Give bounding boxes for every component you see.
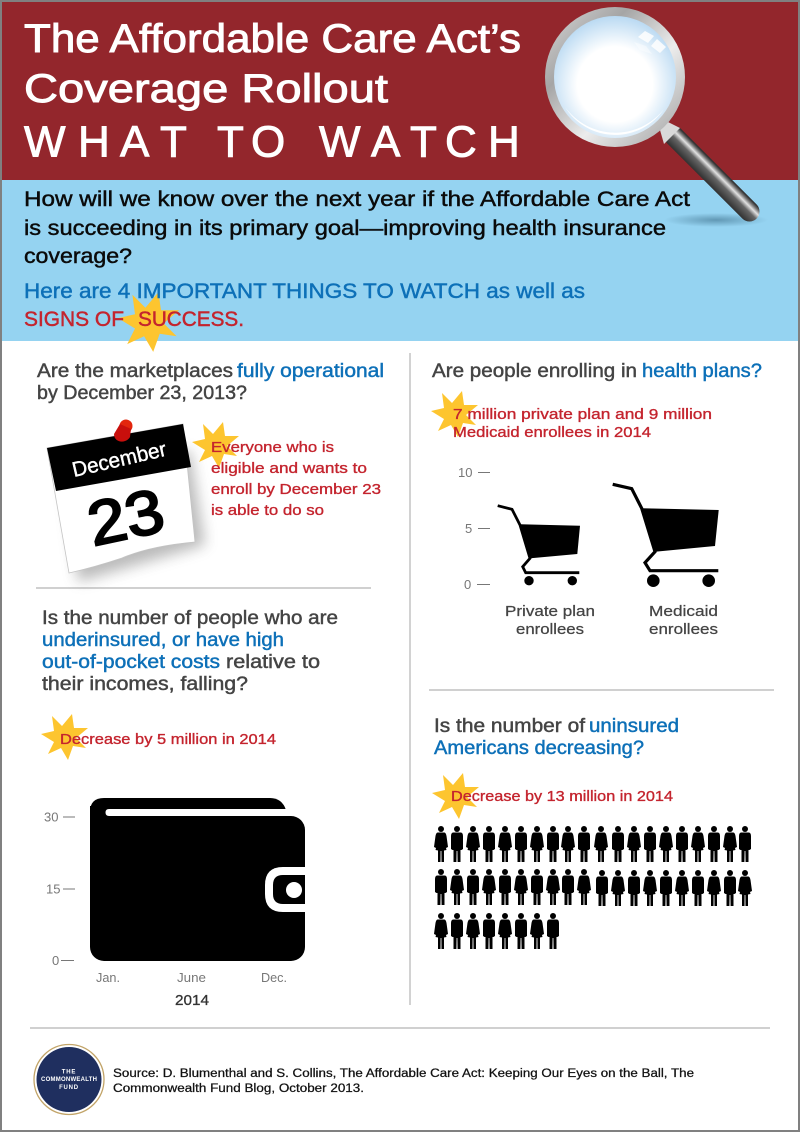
dividers xyxy=(30,353,774,1028)
heading: marketplaces xyxy=(37,361,384,404)
success sign: uninsured: Decrease by 13 million in 2014 xyxy=(451,788,673,805)
heading: underinsured xyxy=(42,608,338,695)
chart axis: underinsured: Dec. xyxy=(261,970,287,985)
panel: title banner xyxy=(0,0,800,180)
success sign: marketplaces: is able to do so xyxy=(211,502,324,519)
intro callout: SIGNS OF xyxy=(24,308,124,331)
label: medicaid enrollees: Medicaid xyxy=(649,603,718,620)
icon: calendar page: December xyxy=(70,438,169,482)
chart axis: underinsured: 0 xyxy=(52,953,59,968)
heading: uninsured: Americans decreasing? xyxy=(434,738,644,759)
heading: underinsured: Is the number of people who are xyxy=(42,608,338,629)
icon: starburst xyxy=(431,391,478,437)
panel: uninsured xyxy=(432,716,752,949)
icon: magnifying glass xyxy=(545,7,768,227)
success sign: marketplaces xyxy=(211,439,381,519)
icon: starburst xyxy=(118,292,179,352)
title: Coverage Rollout xyxy=(24,67,388,111)
success sign: enrollment xyxy=(453,406,712,441)
icon: private plan cart xyxy=(498,506,580,585)
icon: calendar page xyxy=(47,420,205,582)
title: WHAT TO WATCH xyxy=(24,118,520,166)
logo: The Commonwealth Fund: COMMONWEALTH xyxy=(41,1077,97,1083)
icon: wallet xyxy=(90,798,305,961)
panel: footer xyxy=(34,1044,694,1114)
heading: uninsured: Is the number of xyxy=(434,716,586,737)
label: private plan enrollees: enrollees xyxy=(516,621,584,638)
label: private plan enrollees xyxy=(505,603,595,638)
label: medicaid enrollees xyxy=(649,603,718,638)
success sign: marketplaces: eligible and wants to xyxy=(211,460,367,477)
heading: marketplaces: Are the marketplaces xyxy=(37,361,233,382)
logo: The Commonwealth Fund xyxy=(34,1044,104,1114)
intro callout: Here are 4 IMPORTANT THINGS TO WATCH as well as xyxy=(24,280,585,303)
logo: The Commonwealth Fund: THE xyxy=(62,1070,76,1076)
chart axis: underinsured: 15 xyxy=(46,882,60,896)
panel: marketplaces xyxy=(37,361,384,582)
heading: underinsured: underinsured, or have high xyxy=(42,630,284,651)
chart axis: underinsured: June xyxy=(177,970,206,985)
pictogram: 13 million people xyxy=(434,826,752,949)
chart axis: underinsured: Jan. xyxy=(96,970,120,985)
heading: underinsured: out-of-pocket costs xyxy=(42,652,220,673)
icon: starburst xyxy=(192,422,239,468)
chart axis: underinsured xyxy=(44,810,287,1009)
icon: medicaid cart xyxy=(613,484,719,587)
success sign: enrollment: Medicaid enrollees in 2014 xyxy=(453,424,651,441)
heading: enrollment: Are people enrolling in xyxy=(432,361,637,382)
chart axis: enrollees xyxy=(458,465,490,592)
icon: starburst xyxy=(41,714,88,760)
label: private plan enrollees: Private plan xyxy=(505,603,595,620)
source note xyxy=(113,1068,694,1095)
success sign: enrollment: 7 million private plan and 9 million xyxy=(453,406,712,423)
heading: uninsured xyxy=(434,716,679,759)
panel: introduction xyxy=(0,180,800,352)
title xyxy=(24,17,521,166)
panel: enrollment xyxy=(431,361,762,638)
success sign: marketplaces: enroll by December 23 xyxy=(211,481,381,498)
chart axis: enrollees: 10 xyxy=(458,465,472,480)
intro question xyxy=(24,188,690,268)
success sign: underinsured: Decrease by 5 million in 2014 xyxy=(60,731,276,748)
heading: marketplaces: fully operational xyxy=(237,361,384,382)
heading: marketplaces: by December 23, 2013? xyxy=(37,383,247,404)
chart axis: enrollees: 0 xyxy=(464,577,471,592)
heading: underinsured: relative to xyxy=(226,652,320,673)
intro question: coverage? xyxy=(24,245,132,268)
intro callout xyxy=(24,280,585,331)
logo: The Commonwealth Fund: FUND xyxy=(59,1085,79,1091)
chart axis: underinsured: 30 xyxy=(44,810,58,824)
heading: enrollment: health plans? xyxy=(642,361,762,382)
source note: Commonwealth Fund Blog, October 2013. xyxy=(113,1083,364,1095)
panel: underinsured xyxy=(41,608,338,1009)
intro question: How will we know over the next year if the Affordable Care Act xyxy=(24,188,690,211)
intro question: is succeeding in its primary goal—improving health insurance xyxy=(24,217,666,240)
heading: underinsured: their incomes, falling? xyxy=(42,674,248,695)
label: medicaid enrollees: enrollees xyxy=(649,621,718,638)
intro callout: SUCCESS. xyxy=(138,308,244,331)
chart axis: underinsured: 2014 xyxy=(175,992,209,1009)
icon: calendar page: 23 xyxy=(82,476,170,560)
title: The Affordable Care Act’s xyxy=(24,17,521,61)
heading: enrollment xyxy=(432,361,762,382)
success sign: marketplaces: Everyone who is xyxy=(211,439,334,456)
heading: uninsured: uninsured xyxy=(589,716,679,737)
source note: Source: D. Blumenthal and S. Collins, The Affordable Care Act: Keeping Our Eyes on the Ball, The xyxy=(113,1068,694,1080)
icon: starburst xyxy=(432,773,479,819)
chart axis: enrollees: 5 xyxy=(465,521,472,536)
